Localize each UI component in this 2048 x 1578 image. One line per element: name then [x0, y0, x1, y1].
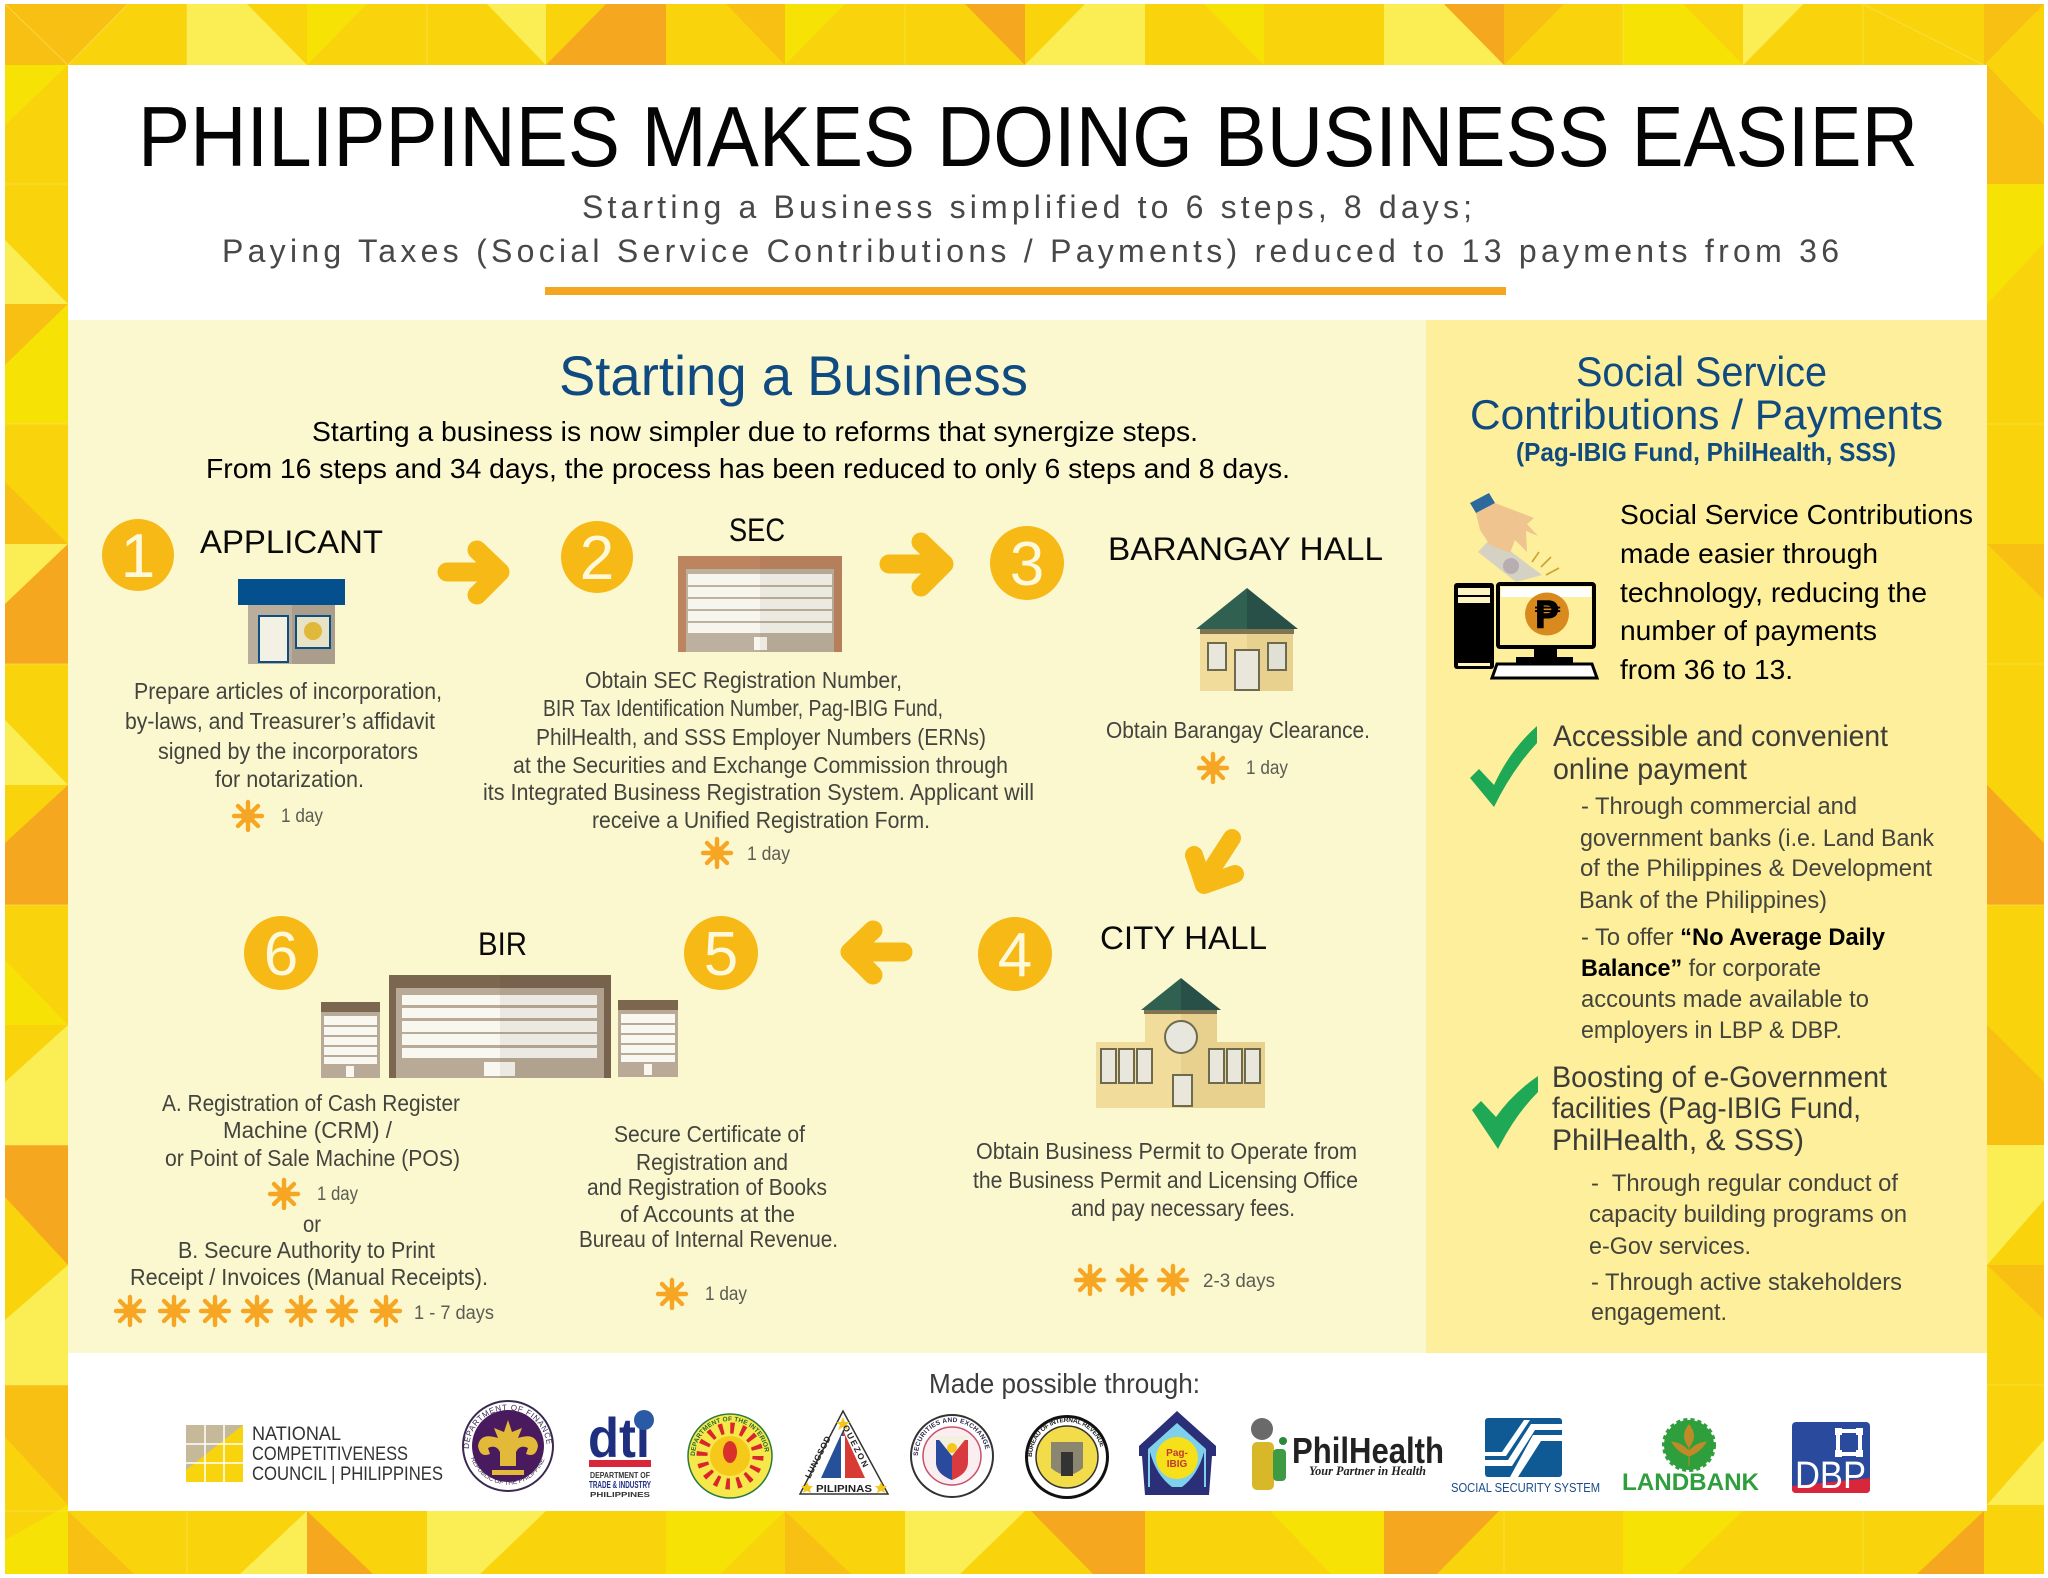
footer panel [68, 1353, 1987, 1511]
step 2: SEC [483, 512, 1034, 867]
logo: Social Security System: SOCIAL SECURITY SYSTEM [1451, 1480, 1600, 1495]
logo: DTI: DEPARTMENT OF [590, 1471, 650, 1480]
logo: Social Security System [1451, 1418, 1600, 1495]
step 3: barangay hall [990, 526, 1383, 782]
logo: Pag-IBIG Fund: IBIG [1167, 1459, 1187, 1470]
item: boosting e-government facilities: e-Gov services. [1589, 1233, 1751, 1260]
step 1: applicant: APPLICANT [200, 524, 383, 560]
logo: Department of Finance: DEPARTMENT OF FINANCE [464, 1404, 552, 1448]
logo: Quezon City: PILIPINAS [816, 1484, 872, 1495]
logo: Quezon City [800, 1411, 888, 1495]
step 3: barangay hall: 3 [1010, 530, 1044, 599]
intro text: Starting a business is now simpler due to reforms that synergize steps. [312, 416, 1198, 447]
logo: PhilHealth: PhilHealth [1292, 1430, 1444, 1471]
step 2: SEC: SEC [729, 512, 785, 548]
item: accessible online payment: Bank of the Philippines) [1579, 887, 1827, 914]
icon: check mark 1 [1470, 726, 1537, 807]
social service summary text: Social Service Contributions [1620, 499, 1973, 530]
step 6: BIR: 1 - 7 days [414, 1303, 494, 1324]
step 6: BIR [116, 916, 678, 1325]
icon: SEC building [678, 556, 842, 652]
item: accessible online payment: of the Philippines & Development [1580, 855, 1932, 882]
logo: Pag-IBIG Fund [1139, 1411, 1216, 1495]
header panel [68, 65, 1987, 320]
social service summary text [1620, 499, 1973, 685]
step 2: SEC: at the Securities and Exchange Commission through [513, 752, 1008, 778]
step 6: BIR: Machine (CRM) / [223, 1117, 393, 1143]
icon: BIR building [321, 975, 678, 1078]
step 1: applicant [102, 519, 442, 830]
item: boosting e-government facilities: facilities (Pag-IBIG Fund, [1552, 1092, 1861, 1125]
logo: Quezon City: LUNGSOD [803, 1434, 833, 1480]
logo: National Competitiveness Council: COMPETITIVENESS [252, 1444, 408, 1465]
step 6: BIR: or [303, 1211, 321, 1237]
step 6: BIR: Receipt / Invoices (Manual Receipts). [130, 1264, 488, 1290]
step 6: BIR: B. Secure Authority to Print [178, 1237, 436, 1263]
panel heading: Contributions / Payments [1470, 391, 1943, 438]
step 6: BIR: 6 [264, 920, 298, 989]
social service summary text: from 36 to 13. [1620, 654, 1793, 685]
step 5: registration of books: 1 day [705, 1284, 747, 1305]
arrow: step 4 to 5 [850, 930, 903, 975]
logo: Department of Finance: REPUBLIC OF THE PHILIPPINES [471, 1457, 544, 1485]
logo: Landbank: LANDBANK [1622, 1469, 1760, 1496]
panel heading [1470, 348, 1943, 467]
item: boosting e-government facilities: PhilHealth, & SSS) [1552, 1124, 1804, 1157]
step 1: applicant: Prepare articles of incorporation, [134, 678, 442, 704]
item: accessible online payment: accounts made available to [1581, 986, 1869, 1013]
icon: city hall [1096, 978, 1265, 1108]
icon: house [1196, 588, 1298, 691]
step 6: BIR: A. Registration of Cash Register [162, 1090, 460, 1116]
step 4: city hall: 2-3 days [1203, 1271, 1275, 1292]
intro text [206, 416, 1290, 484]
intro text: From 16 steps and 34 days, the process has been reduced to only 6 steps and 8 days. [206, 453, 1290, 484]
step 5: registration of books: 5 [704, 920, 738, 989]
step 3: barangay hall: Obtain Barangay Clearance. [1106, 717, 1370, 743]
arrow: step 1 to 2 [447, 550, 500, 595]
subtitle: Starting a Business simplified to 6 steps, 8 days; [582, 189, 1472, 225]
step 2: SEC: Obtain SEC Registration Number, [585, 667, 902, 693]
icon: hand paying through computer [1454, 493, 1597, 678]
logo: DILG: DEPARTMENT OF THE INTERIOR [690, 1416, 769, 1456]
item: accessible online payment: Accessible and convenient [1553, 720, 1889, 753]
arrow: step 3 to 4 [1194, 838, 1235, 885]
logo: Pag-IBIG Fund: Pag- [1166, 1448, 1188, 1459]
item: boosting e-government facilities: - Through active stakeholders [1591, 1269, 1902, 1296]
step 1: applicant: by-laws, and Treasurer’s affidavit [125, 708, 436, 734]
panel: social service contributions [1426, 320, 1987, 1353]
step 1: applicant: signed by the incorporators [158, 738, 418, 764]
step 2: SEC: receive a Unified Registration Form. [592, 807, 930, 833]
header underline [545, 287, 1506, 295]
step 4: city hall: and pay necessary fees. [1071, 1195, 1295, 1221]
logo: PhilHealth: Your Partner in Health [1309, 1463, 1426, 1478]
logo: Securities and Exchange Commission [910, 1414, 994, 1498]
step 6: BIR: 1 day [317, 1184, 358, 1205]
step 2: SEC: 1 day [747, 844, 790, 865]
social service summary text: made easier through [1620, 538, 1878, 569]
footer heading: Made possible through: [929, 1368, 1200, 1399]
step 4: city hall: 4 [998, 921, 1032, 990]
step 5: registration of books: of Accounts at the [620, 1201, 795, 1227]
item: accessible online payment [1553, 720, 1935, 1044]
step 5: registration of books: Registration and [636, 1149, 788, 1175]
step 5: registration of books [579, 916, 838, 1308]
item: boosting e-government facilities: capacity building programs on [1589, 1201, 1907, 1228]
icon: shop [238, 579, 345, 664]
logo: National Competitiveness Council [186, 1424, 443, 1485]
step 4: city hall: Obtain Business Permit to Operate from [976, 1138, 1357, 1164]
item: boosting e-government facilities [1552, 1061, 1907, 1326]
step 6: BIR: or Point of Sale Machine (POS) [165, 1145, 460, 1171]
heading: Starting a Business [559, 344, 1028, 407]
item: accessible online payment: employers in LBP & DBP. [1581, 1017, 1842, 1044]
logo: DTI [588, 1406, 654, 1499]
icon: check mark 2 [1472, 1076, 1538, 1149]
social service summary text: technology, reducing the [1620, 577, 1927, 608]
step 5: registration of books: Secure Certificate of [614, 1121, 806, 1147]
logo: Securities and Exchange Commission: SECURITIES AND EXCHANGE [914, 1417, 990, 1456]
logo: Quezon City: QUEZON [841, 1423, 871, 1469]
subtitle: Paying Taxes (Social Service Contributions / Payments) reduced to 13 payments from 36 [222, 233, 1839, 269]
step 1: applicant: 1 [121, 522, 155, 591]
logo: DBP: DBP [1795, 1455, 1866, 1497]
item: boosting e-government facilities: Boosting of e-Government [1552, 1061, 1888, 1094]
subtitle [222, 189, 1839, 269]
arrow: step 2 to 3 [889, 542, 944, 587]
logo: DBP [1792, 1422, 1870, 1497]
panel heading: (Pag-IBIG Fund, PhilHealth, SSS) [1516, 437, 1896, 467]
item: boosting e-government facilities: - Through regular conduct of [1591, 1170, 1898, 1197]
logo: Bureau of Internal Revenue: BUREAU OF INTERNAL REVENUE [1028, 1418, 1104, 1457]
step 5: registration of books: and Registration of Books [587, 1174, 827, 1200]
step 2: SEC: PhilHealth, and SSS Employer Numbers (ERNs) [536, 724, 986, 750]
step 2: SEC: 2 [580, 524, 614, 593]
item: accessible online payment: online payment [1553, 753, 1748, 786]
icon: hand paying through computer: ₱ [1534, 593, 1561, 637]
step 5: registration of books: Bureau of Internal Revenue. [579, 1226, 838, 1252]
item: accessible online payment: - Through commercial and [1581, 793, 1857, 820]
title: PHILIPPINES MAKES DOING BUSINESS EASIER [138, 90, 1918, 185]
logo: DILG [687, 1413, 773, 1499]
step 3: barangay hall: BARANGAY HALL [1108, 531, 1383, 567]
logo: PhilHealth [1251, 1418, 1444, 1490]
item: accessible online payment: Balance” for corporate [1581, 955, 1821, 982]
item: accessible online payment: government banks (i.e. Land Bank [1580, 825, 1935, 852]
step 4: city hall [973, 917, 1358, 1294]
step 1: applicant: 1 day [281, 806, 323, 827]
step 4: city hall: the Business Permit and Licensing Office [973, 1167, 1358, 1193]
logo: DTI: PHILIPPINES [590, 1492, 650, 1499]
step 4: city hall: CITY HALL [1100, 920, 1267, 956]
step 1: applicant: for notarization. [215, 766, 364, 792]
step 2: SEC: BIR Tax Identification Number, Pag-IBIG Fund, [543, 695, 943, 721]
item: accessible online payment: - To offer “No Average Daily [1581, 924, 1886, 951]
logo: DTI: dti [588, 1406, 650, 1469]
step 2: SEC: its Integrated Business Registration System. Applicant will [483, 779, 1034, 805]
panel heading: Social Service [1576, 348, 1827, 395]
logo: Bureau of Internal Revenue [1025, 1415, 1109, 1499]
step 6: BIR: BIR [478, 926, 527, 962]
logo: National Competitiveness Council: NATIONAL [252, 1424, 341, 1445]
item: boosting e-government facilities: engagement. [1591, 1299, 1727, 1326]
step 3: barangay hall: 1 day [1246, 758, 1288, 779]
logo: National Competitiveness Council: COUNCIL | PHILIPPINES [252, 1464, 443, 1485]
logo: Landbank [1622, 1420, 1760, 1496]
logo: Department of Finance [462, 1400, 554, 1492]
logo: DTI: TRADE & INDUSTRY [589, 1480, 651, 1491]
social service summary text: number of payments [1620, 615, 1877, 646]
